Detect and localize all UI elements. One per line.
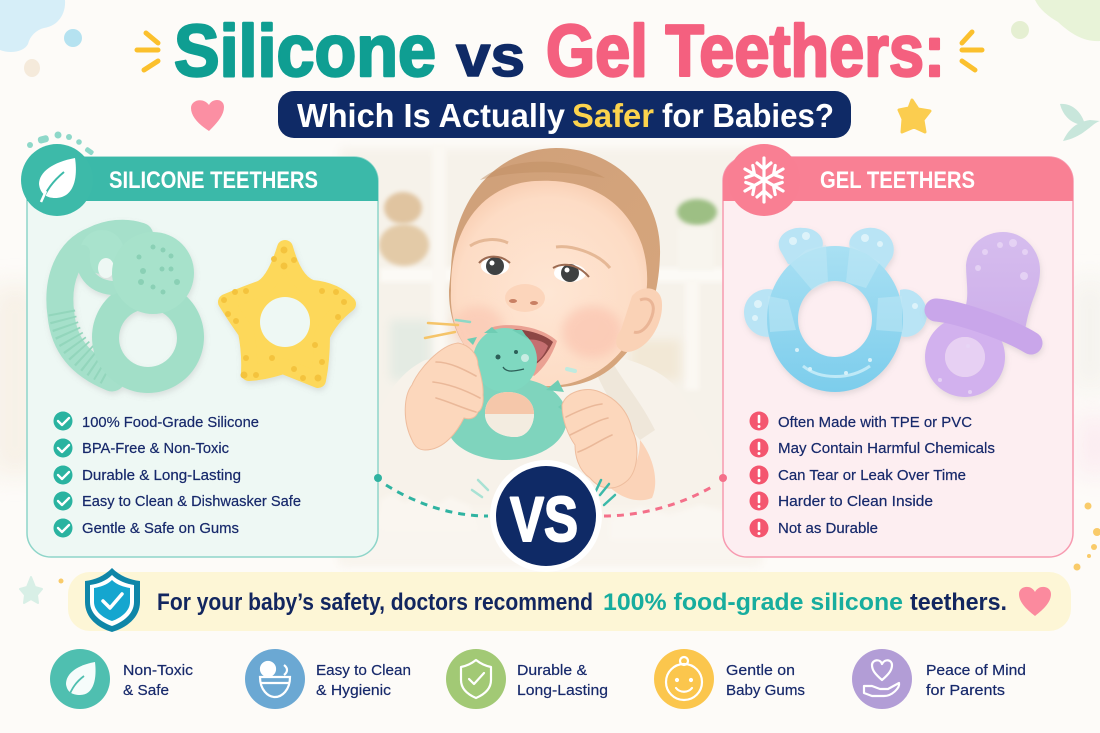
body onesie — [399, 360, 669, 381]
VS badge — [490, 460, 602, 572]
icon: leaf — [66, 662, 96, 698]
icon: heart in hand — [864, 660, 899, 696]
icon: right sparkle — [962, 32, 982, 70]
heading: SILICONE TEETHERS — [109, 167, 318, 194]
panel: gel teethers — [723, 144, 1073, 557]
feature: peace of mind: for Parents — [926, 682, 1005, 699]
feature: gentle on gums: Baby Gums — [726, 682, 805, 699]
icon: star — [899, 100, 930, 132]
green elephant teether — [60, 230, 204, 393]
feature: durable — [446, 649, 608, 709]
decorative corner blobs — [0, 0, 1100, 141]
title: Silicone — [174, 11, 436, 92]
warning list: gel risks: Not as Durable — [778, 520, 878, 537]
checklist: silicone benefits: Gentle & Safe on Gums — [82, 520, 239, 537]
motion marks — [425, 320, 615, 505]
feature: non-toxic: Non-Toxic — [123, 662, 194, 679]
warning list: gel risks: Harder to Clean Inside — [778, 493, 933, 510]
icon: banner heart — [1019, 587, 1051, 616]
subtitle pill: for Babies? — [662, 97, 834, 134]
feature: gentle on gums: Gentle on — [726, 662, 795, 679]
blue gel ring teether — [744, 228, 927, 392]
icon: shield — [85, 568, 140, 632]
header band — [27, 157, 378, 201]
checklist: silicone benefits — [54, 412, 301, 538]
left hand — [405, 343, 483, 450]
checklist: silicone benefits: Easy to Clean & Dishwasker Safe — [82, 493, 301, 510]
connector: VS to gel — [604, 474, 727, 516]
VS badge: VS — [510, 485, 578, 555]
connector: silicone to VS — [374, 474, 488, 516]
feature: easy to clean: Easy to Clean — [316, 662, 411, 679]
subtitle pill — [278, 91, 851, 138]
right hand and wrist — [562, 390, 655, 500]
photo: baby with teether — [340, 145, 760, 564]
checklist: silicone benefits: Durable & Long-Lasting — [82, 467, 241, 484]
banner text: 100% food-grade silicone — [603, 589, 903, 616]
nose — [505, 284, 545, 312]
icon: heart — [191, 100, 224, 131]
ear — [616, 288, 662, 352]
icon: bowl — [260, 662, 290, 697]
faint blurred side background — [0, 280, 1100, 475]
icon: baby face — [666, 657, 702, 700]
warning list: gel risks: Often Made with TPE or PVC — [778, 414, 972, 431]
baby's teether — [447, 327, 567, 460]
fluffy rug — [340, 494, 760, 564]
feature: durable: Long-Lasting — [517, 682, 608, 699]
feature: non-toxic: & Safe — [123, 682, 169, 699]
yellow star teether — [221, 246, 348, 382]
feature: easy to clean: & Hygienic — [316, 682, 392, 699]
header band — [723, 157, 1073, 201]
photo background — [342, 149, 744, 464]
purple gel pacifier teether — [925, 232, 1040, 397]
feature: peace of mind: Peace of Mind — [926, 662, 1026, 679]
title: vs — [456, 24, 525, 89]
eyes — [470, 240, 610, 282]
subtitle pill: Which Is Actually — [297, 97, 566, 134]
warning list: gel risks: Can Tear or Leak Over Time — [778, 467, 966, 484]
panel: silicone teethers — [21, 132, 378, 557]
small star decoration — [20, 577, 42, 603]
checklist: silicone benefits: 100% Food-Grade Silicone — [82, 414, 259, 431]
feature: non-toxic — [50, 649, 194, 709]
banner text: For your baby’s safety, doctors recommend — [157, 589, 593, 616]
dots decoration — [58, 502, 1100, 584]
icon: leaf badge — [21, 144, 93, 216]
title — [174, 11, 945, 92]
icon: shield check — [461, 660, 491, 698]
icon: snowflake badge — [728, 144, 800, 216]
mouth — [490, 325, 557, 376]
banner text — [157, 589, 1007, 616]
checklist: silicone benefits: BPA-Free & Non-Toxic — [82, 440, 229, 457]
icon: left sparkle — [137, 33, 158, 70]
feature: easy to clean — [245, 649, 411, 709]
warning list: gel risks: May Contain Harmful Chemicals — [778, 440, 995, 457]
warning list: gel risks — [750, 412, 995, 538]
safety banner — [68, 568, 1071, 632]
feature: gentle on gums — [654, 649, 805, 709]
feature: peace of mind — [852, 649, 1026, 709]
banner text: teethers. — [910, 589, 1007, 616]
heading: GEL TEETHERS — [820, 167, 975, 194]
subtitle pill: Safer — [572, 97, 654, 134]
feature: durable: Durable & — [517, 662, 587, 679]
icon: badge dots — [27, 132, 94, 156]
title: Gel Teethers: — [546, 11, 945, 92]
head — [449, 148, 660, 388]
